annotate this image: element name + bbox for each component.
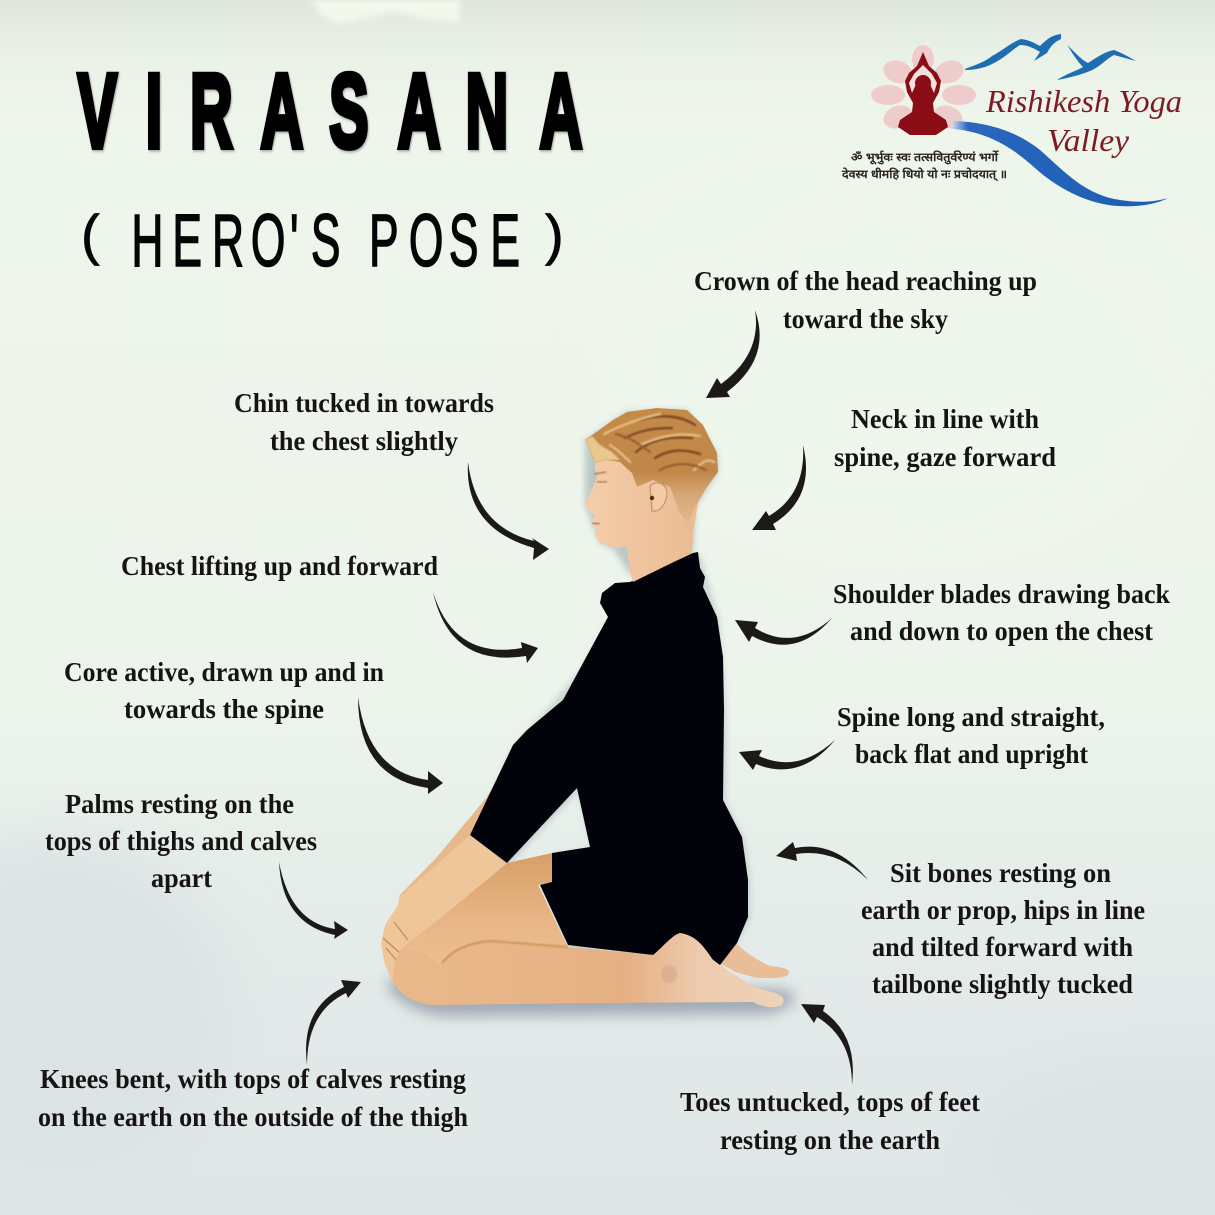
arrow: sit bones (776, 842, 868, 880)
arrow: chin (468, 462, 549, 560)
subtitle: HERO'S POSE (131, 199, 520, 282)
lower leg and foot (393, 933, 784, 1007)
callout: spine: Spine long and straight, (837, 702, 1105, 732)
thigh (403, 853, 568, 965)
icon: mountains (965, 34, 1061, 70)
callout: palms: tops of thighs and calves (45, 826, 317, 856)
arrow: spine (739, 740, 835, 770)
arrow: chest (433, 592, 538, 663)
ankle detail (661, 965, 677, 983)
icon: second mountains (1057, 45, 1136, 80)
mantra: देवस्य धीमहि धियो यो नः प्रचोदयात् ॥ (841, 167, 1007, 182)
ear (650, 483, 667, 511)
callout: neck (834, 404, 1056, 472)
torso soft shadow (472, 554, 750, 967)
callout: chin: the chest slightly (270, 426, 458, 456)
mantra (841, 150, 1007, 182)
callout: chin: Chin tucked in towards (234, 388, 494, 418)
callout: knees (38, 1064, 468, 1132)
callout: core: Core active, drawn up and in (64, 657, 384, 687)
callout: sit bones (861, 858, 1145, 999)
head soft shadow (585, 410, 718, 575)
arrow: shoulder (735, 618, 832, 645)
callout: sit bones: earth or prop, hips in line (861, 895, 1145, 925)
callout: core: towards the spine (124, 694, 324, 724)
ground shadow (385, 975, 796, 1016)
back foot (718, 944, 789, 978)
far forearm (398, 753, 520, 905)
callout: palms: Palms resting on the (65, 789, 294, 819)
mantra: ॐ भूर्भुवः स्वः तत्सवितुर्वरेण्यं भर्गो (851, 150, 999, 165)
callout: toes: Toes untucked, tops of feet (680, 1087, 980, 1117)
callout: neck: spine, gaze forward (834, 442, 1056, 472)
title: VIRASANA (78, 53, 582, 170)
arrow: core (358, 697, 443, 794)
callout: palms (45, 789, 317, 893)
ear inner (650, 496, 654, 500)
callout: chin (234, 388, 494, 456)
callouts (38, 266, 1170, 1155)
callout: spine (837, 702, 1105, 769)
subtitle: ( (81, 203, 100, 266)
hair strands (604, 414, 714, 470)
sweater and shorts (470, 552, 748, 965)
lips (592, 523, 600, 524)
near forearm and hand (381, 835, 507, 982)
arrow: toes (801, 1004, 853, 1085)
icon: river (953, 121, 1168, 206)
callout: sit bones: and tilted forward with (872, 932, 1133, 962)
callout: shoulder blades: Shoulder blades drawing back (833, 579, 1170, 609)
callout: chest: Chest lifting up and forward (121, 551, 438, 581)
subtitle: ) (545, 203, 564, 266)
icon: meditating figure (898, 52, 948, 135)
callout: crown: toward the sky (783, 304, 948, 334)
callout: crown: Crown of the head reaching up (694, 266, 1037, 296)
callout: shoulder blades (833, 579, 1170, 646)
arrow: knees (306, 980, 361, 1065)
neck and face (585, 450, 700, 582)
arrow: neck (752, 445, 806, 530)
hair front tuft (585, 436, 620, 463)
callout: knees: on the earth on the outside of the thigh (38, 1102, 468, 1132)
finger lines (383, 922, 408, 962)
callout: neck: Neck in line with (851, 404, 1039, 434)
callout: shoulder blades: and down to open the chest (850, 616, 1153, 646)
callout: spine: back flat and upright (855, 739, 1088, 769)
callout: core (64, 657, 384, 724)
brand name second line: Valley (1047, 122, 1130, 158)
hair (585, 408, 718, 523)
arrow: crown (706, 310, 760, 398)
callout: sit bones: Sit bones resting on (890, 858, 1111, 888)
callout: palms: apart (151, 863, 212, 893)
callout: crown (694, 266, 1037, 334)
arrow: palms (279, 862, 348, 939)
knee crease (442, 941, 568, 963)
callout: knees: Knees bent, with tops of calves resting (40, 1064, 466, 1094)
eye (594, 472, 607, 482)
icon: lotus petals (871, 45, 976, 132)
callout: toes (680, 1087, 980, 1155)
figure: seated man in hero's pose (381, 408, 796, 1016)
callout: toes: resting on the earth (720, 1125, 940, 1155)
logo: Rishikesh Yoga Valley (841, 34, 1182, 206)
brand name: Rishikesh Yoga (985, 83, 1182, 119)
callout: sit bones: tailbone slightly tucked (872, 969, 1133, 999)
